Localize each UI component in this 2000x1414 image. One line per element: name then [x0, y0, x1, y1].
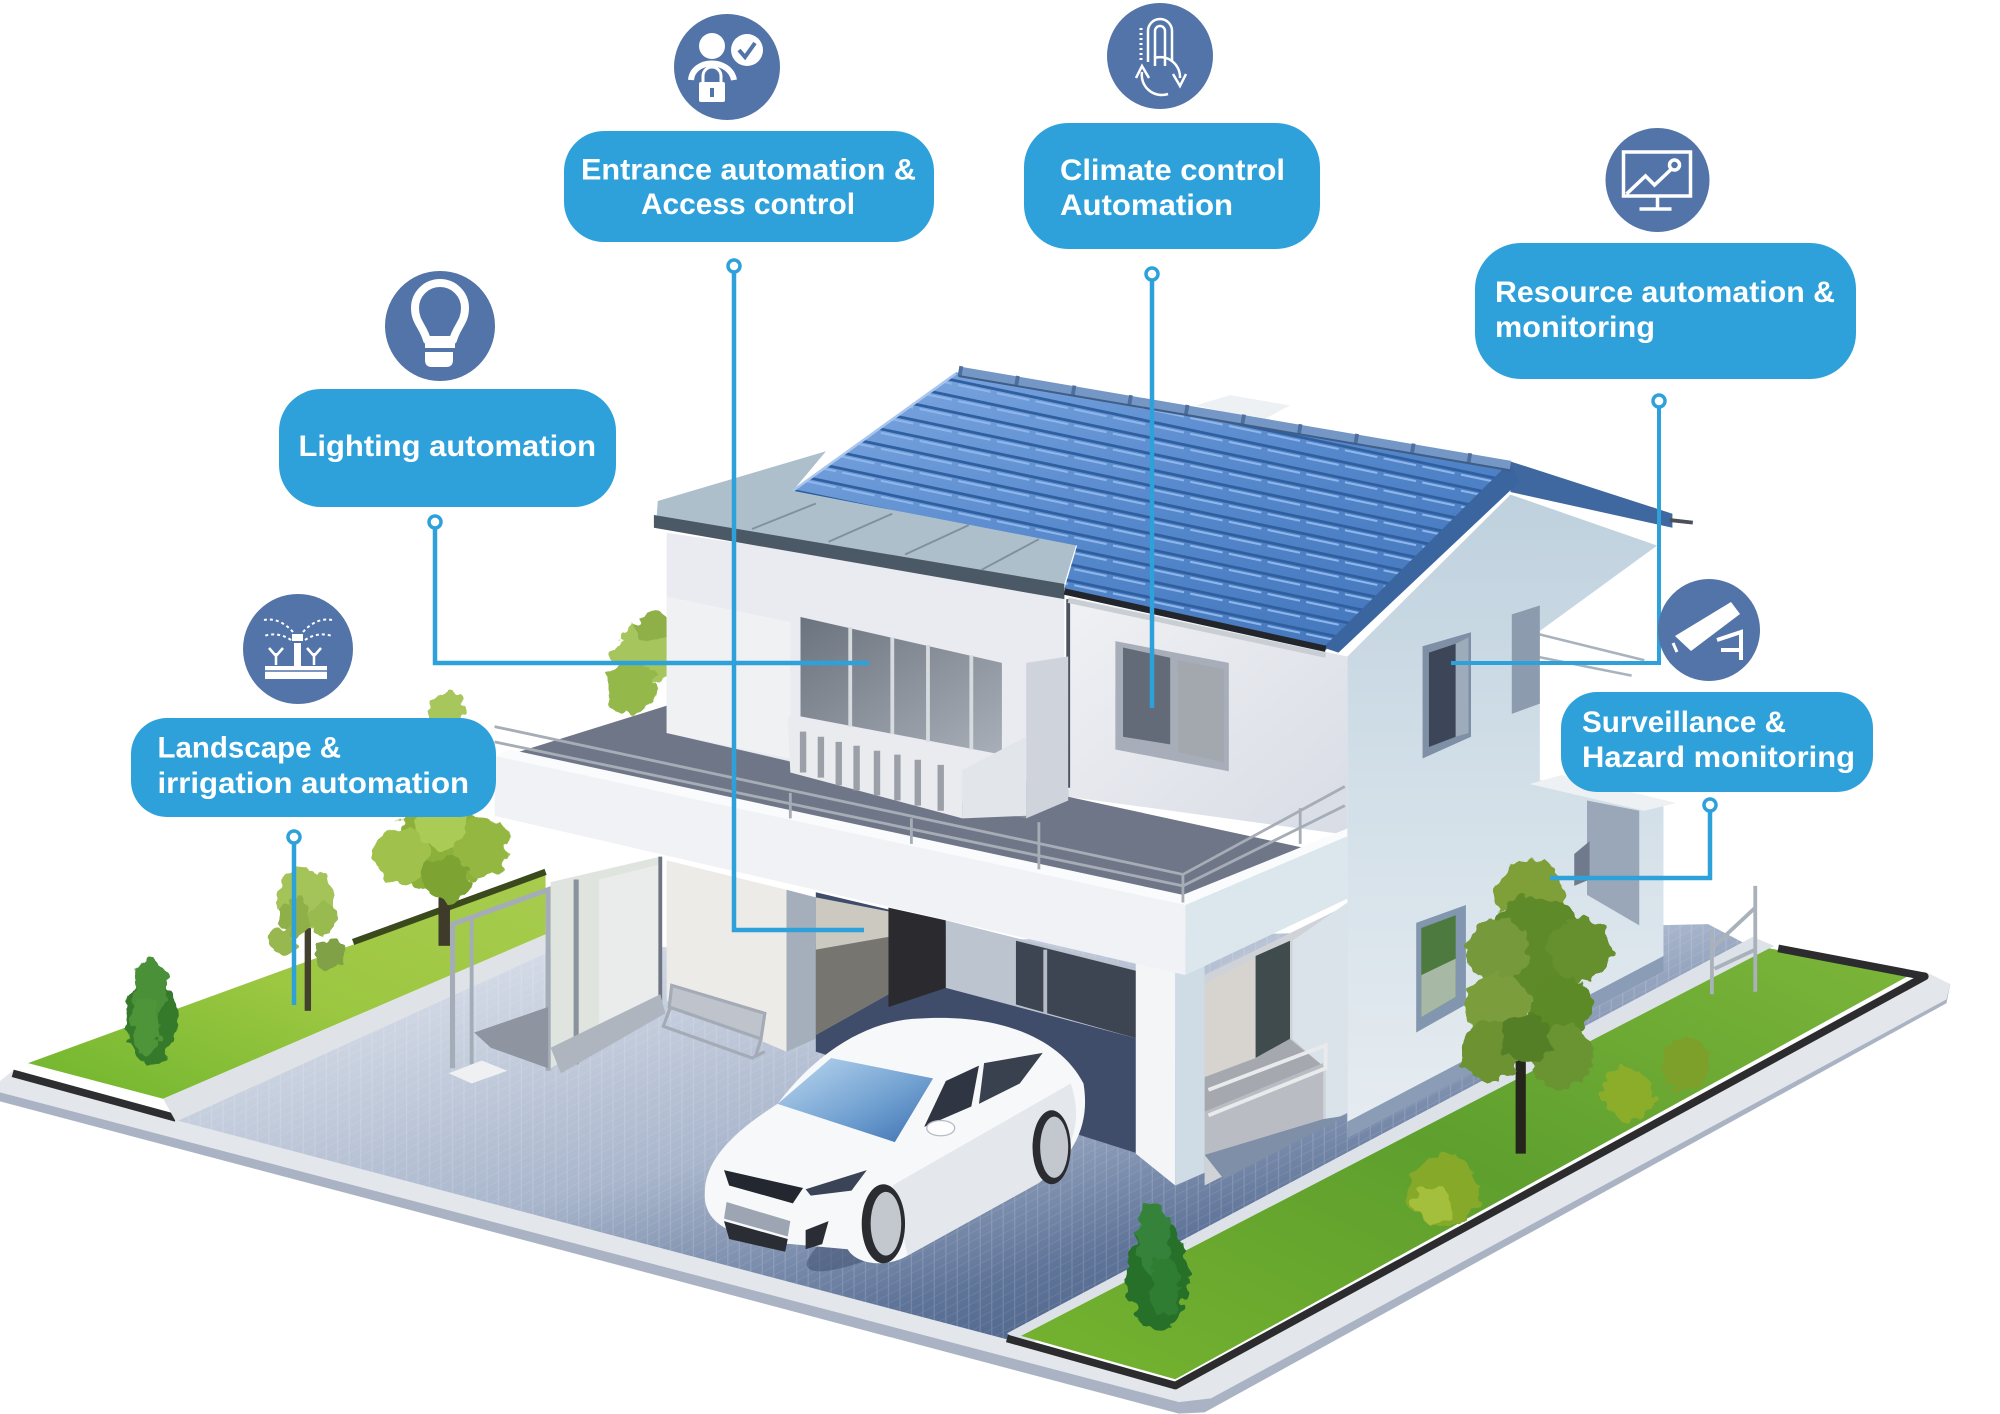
label pill: [564, 131, 934, 242]
callout: landscape and irrigation: [131, 594, 496, 817]
connector: climate: [1146, 268, 1158, 708]
paved driveway: [172, 924, 1757, 1341]
icon: person with lock and check: [674, 14, 780, 120]
label text: Lighting automation: [298, 430, 596, 463]
roof vent: [1196, 395, 1290, 421]
upper floor centre wall: [1068, 597, 1347, 835]
callout: resource automation: [1475, 128, 1856, 379]
rear roof overhang: [1511, 461, 1693, 528]
icon: sprinkler with plants: [243, 594, 353, 704]
carport interior: [816, 892, 1138, 1154]
balcony floor: [510, 705, 1303, 900]
label text: [158, 732, 469, 800]
bushes: [1407, 1040, 1711, 1228]
callout: entrance automation: [564, 14, 934, 242]
base slab: [0, 971, 1950, 1414]
connector: landscape: [288, 831, 300, 1005]
small balcony railing: [788, 716, 1026, 818]
roof gutter: [1064, 591, 1326, 655]
connector: lighting: [429, 516, 869, 663]
label text: Landscape &: [158, 732, 341, 764]
label text: Access control: [641, 188, 855, 221]
tree behind left lawn: [373, 797, 510, 946]
label pill: [279, 389, 616, 507]
label text: [1495, 276, 1835, 344]
background foliage: [427, 612, 674, 730]
label pill: [1561, 692, 1873, 792]
label text: Automation: [1060, 189, 1233, 222]
gable side wall: [1347, 495, 1676, 1138]
icon: security camera: [1658, 579, 1760, 681]
icon: monitor with line chart: [1606, 128, 1710, 232]
label pill: [1024, 123, 1320, 249]
label text: Climate control: [1060, 154, 1285, 187]
right lawn: [1007, 937, 1925, 1386]
white car: [705, 1018, 1085, 1292]
side gate and fence: [1712, 886, 1755, 994]
connector: entrance: [728, 260, 864, 930]
isometric house illustration: [0, 325, 1950, 1414]
label text: monitoring: [1495, 311, 1655, 344]
label pill: [1475, 243, 1856, 379]
icon: light bulb: [385, 271, 495, 381]
front conifer: [1127, 1203, 1188, 1331]
callout: lighting automation: [279, 271, 616, 507]
label text: [1060, 154, 1285, 222]
label text: [581, 154, 916, 221]
bench: [663, 985, 765, 1058]
label text: Entrance automation &: [581, 154, 916, 186]
left conifer: [126, 959, 177, 1066]
main balcony front: [495, 727, 1347, 975]
connector: surveillance: [1550, 799, 1716, 878]
blue main roof: [792, 366, 1512, 653]
left lawn: [13, 872, 546, 1122]
callout: climate control: [1024, 3, 1320, 249]
label text: Surveillance &: [1582, 706, 1786, 739]
callout: surveillance: [1561, 579, 1873, 792]
metal lower roof: [654, 451, 1077, 599]
label text: Hazard monitoring: [1582, 741, 1855, 774]
label pill: [131, 718, 496, 817]
left column: [667, 860, 816, 1052]
glass entrance gate: [449, 857, 665, 1083]
front column: [1136, 962, 1205, 1185]
label text: Resource automation &: [1495, 276, 1835, 309]
label text: [1582, 706, 1855, 774]
icon: thermometer with arrows: [1107, 3, 1213, 109]
label text: irrigation automation: [158, 767, 469, 800]
small tree: [270, 868, 344, 1011]
dormer wing: [667, 533, 1068, 818]
right porch alcove: [1205, 902, 1347, 1185]
connector: resource: [1451, 395, 1665, 663]
big right tree: [1461, 859, 1612, 1154]
side wall windows: [1416, 605, 1540, 1033]
